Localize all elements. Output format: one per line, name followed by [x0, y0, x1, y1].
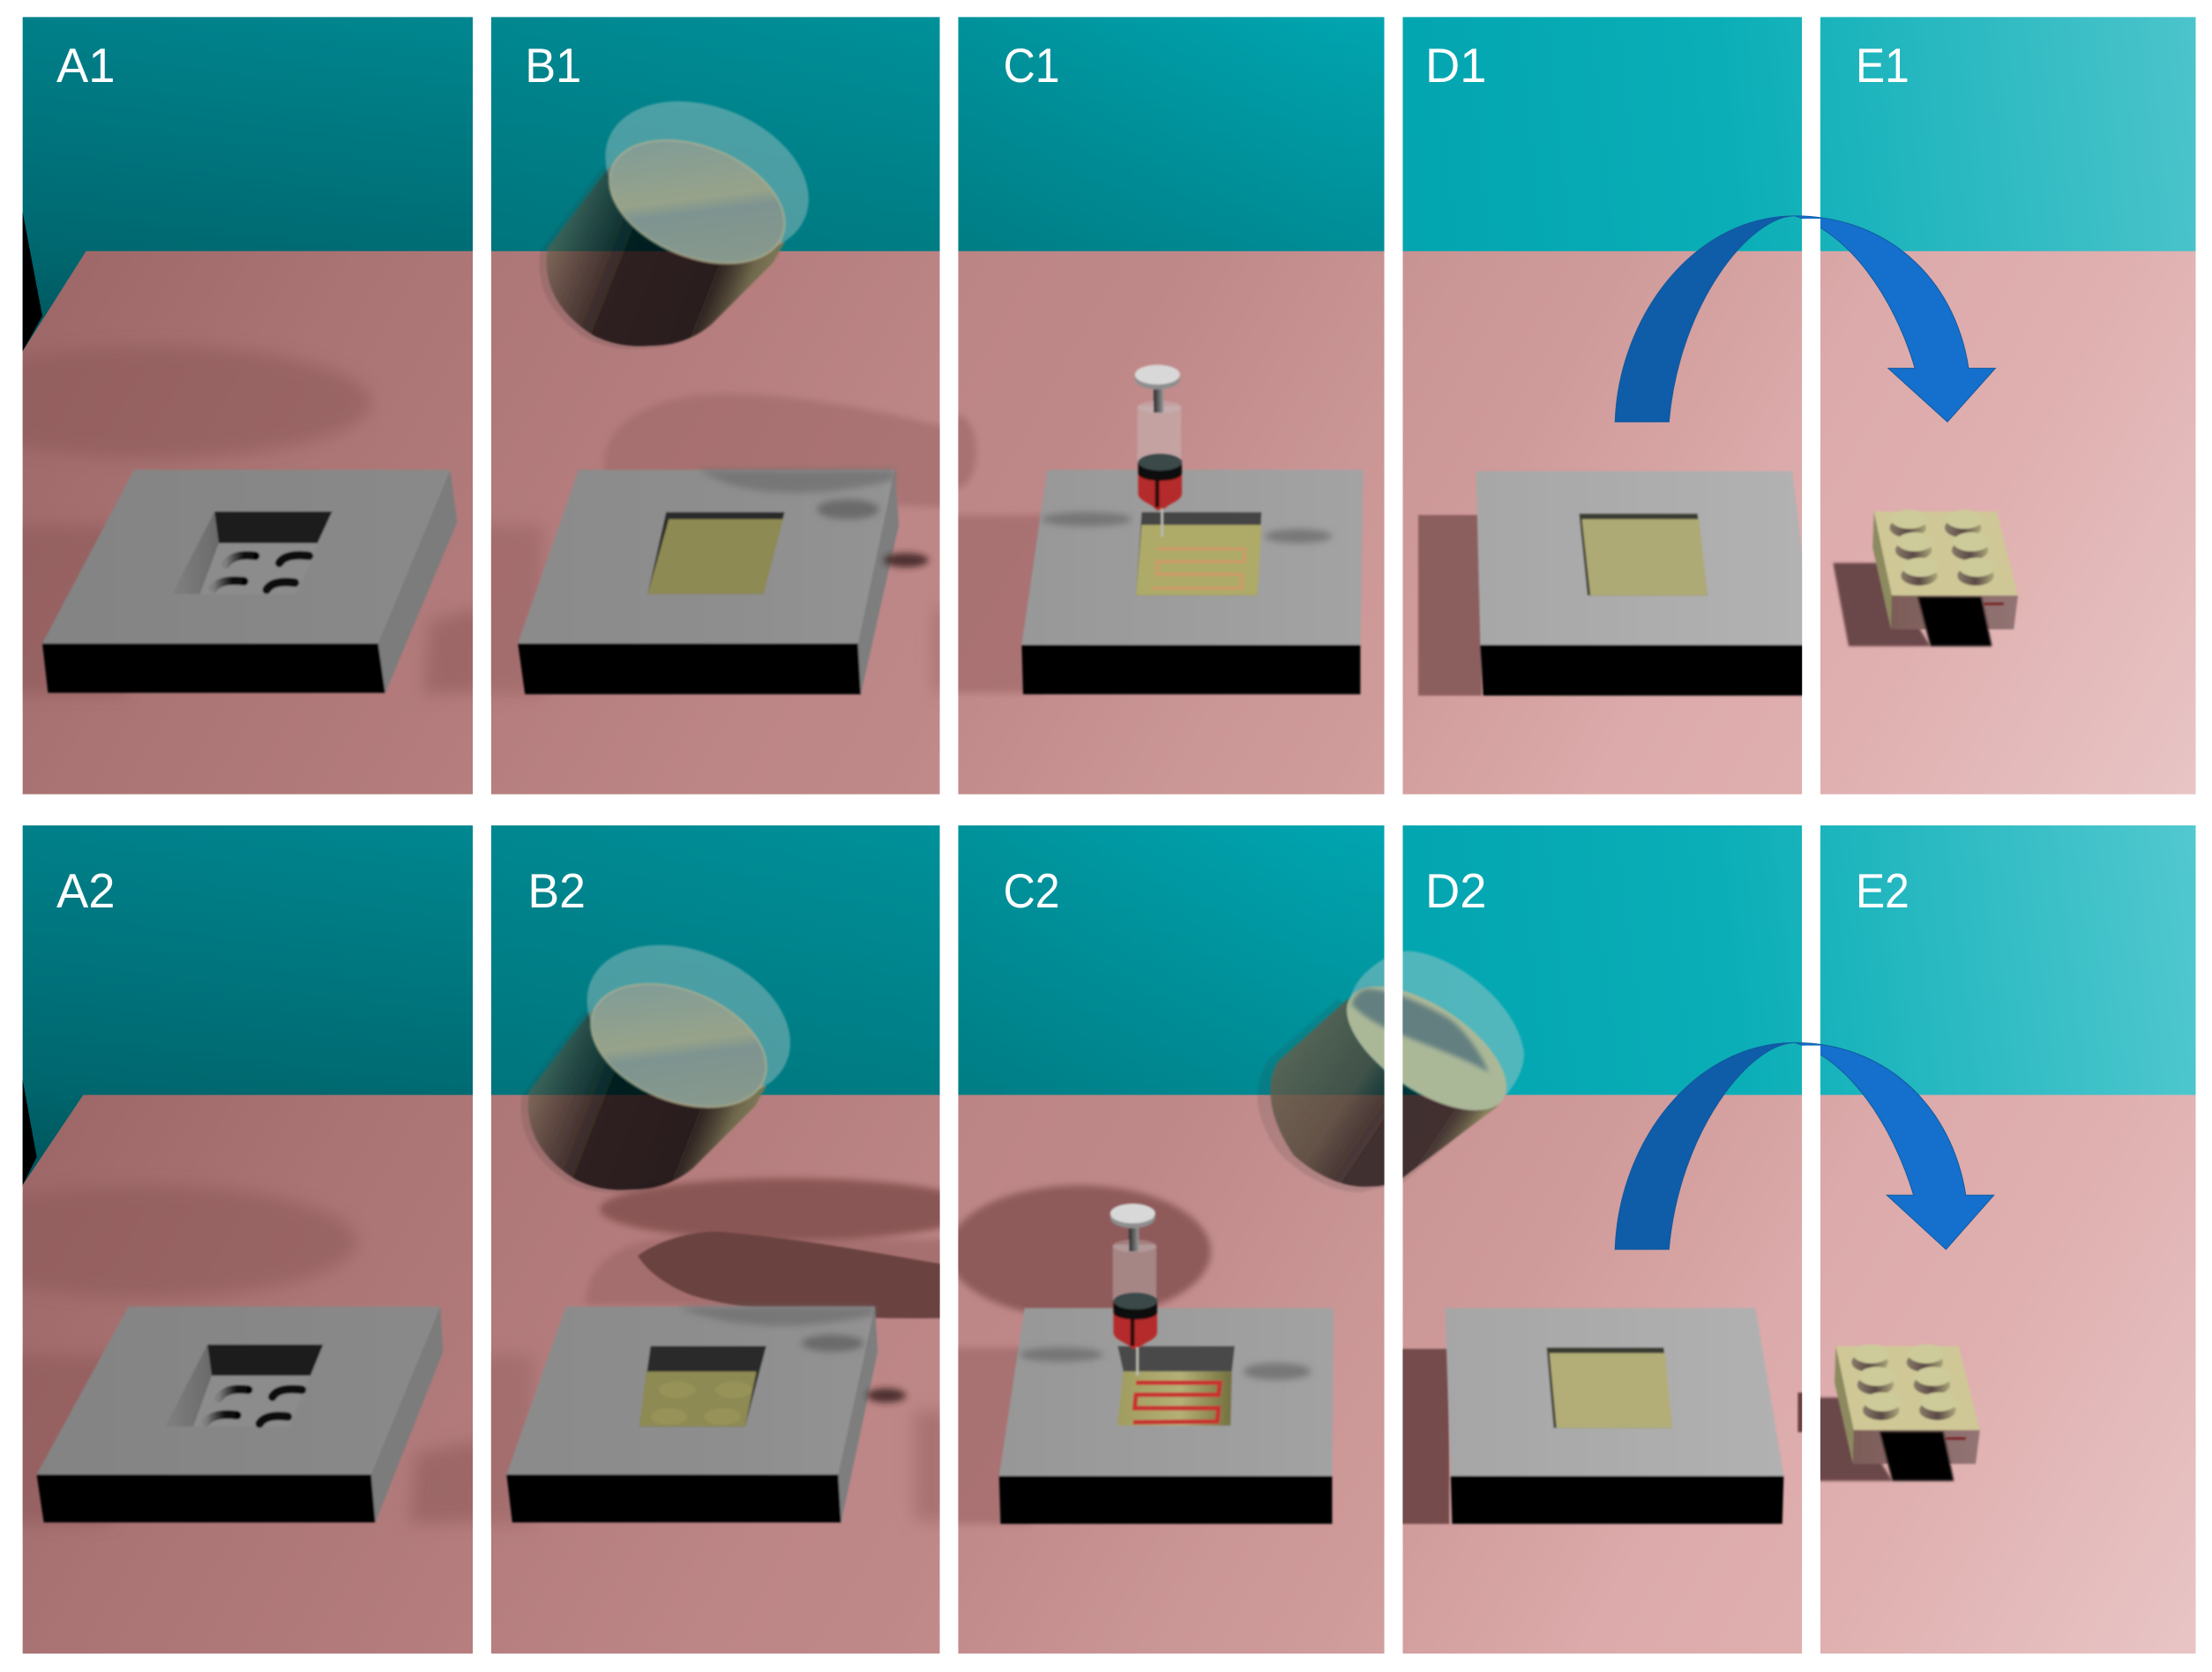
syringe C1	[1135, 365, 1182, 537]
table surface	[1820, 1095, 2196, 1653]
table shadows	[0, 346, 487, 694]
table surface	[1820, 251, 2196, 795]
cylinder mould crossing C2 and D2	[1258, 951, 1527, 1192]
table shadows	[958, 414, 1040, 695]
block A1	[42, 470, 457, 693]
panel: A2	[0, 825, 487, 1653]
table shadows	[604, 393, 960, 508]
label A2: A2	[56, 864, 116, 918]
arrow: flip from D2 to E2	[1615, 1042, 1994, 1250]
cylinder mould B1	[539, 101, 810, 349]
shadow on block	[677, 1307, 906, 1402]
panel: A1	[0, 17, 487, 795]
table surface	[491, 251, 940, 795]
label B1: B1	[525, 39, 581, 93]
shadow on block	[699, 470, 929, 567]
table shadows	[0, 1185, 487, 1524]
shadow on block	[1019, 1347, 1311, 1380]
table shadow	[1418, 515, 1482, 696]
table surface	[1402, 251, 1802, 795]
table surface	[491, 1095, 940, 1653]
label E1: E1	[1856, 39, 1909, 93]
table surface	[1402, 1095, 1802, 1653]
panel: B1	[466, 17, 960, 795]
table shadows	[1390, 1349, 1805, 1524]
table surface	[958, 1095, 1385, 1653]
block C2	[999, 1308, 1334, 1524]
printed brick E2 with shadow	[1795, 1344, 1980, 1481]
table surface	[23, 251, 473, 795]
panel: C1	[937, 17, 1385, 795]
table shadows	[586, 1178, 981, 1305]
cylinder mould B2	[521, 916, 813, 1193]
panel: C2	[945, 825, 1385, 1653]
syringe C2	[1110, 1204, 1157, 1376]
panel: E1	[1820, 17, 2196, 795]
label D1: D1	[1425, 39, 1487, 93]
table shadows	[945, 1185, 1211, 1524]
block D2	[1445, 1308, 1783, 1524]
label E2: E2	[1856, 864, 1909, 918]
printed brick E1 with shadow	[1833, 510, 2018, 646]
block B2	[506, 1307, 878, 1522]
label A1: A1	[56, 39, 116, 93]
table surface	[958, 251, 1385, 795]
block C1	[1021, 470, 1364, 694]
shadow on block	[1042, 512, 1332, 543]
label B2: B2	[527, 864, 586, 918]
block A2	[37, 1307, 443, 1522]
label C1: C1	[1004, 39, 1060, 93]
panel: B2	[466, 825, 981, 1653]
label C2: C2	[1004, 864, 1060, 918]
panel: E2	[1795, 825, 2196, 1653]
room corner in black	[23, 1079, 37, 1185]
table surface	[23, 1095, 473, 1653]
dark cast shadow	[638, 1232, 960, 1318]
room corner in black	[23, 212, 42, 351]
arrow: flip from D1 to E1	[1615, 216, 1995, 422]
label D2: D2	[1425, 864, 1487, 918]
panel: D1	[1402, 17, 1813, 795]
block B1	[518, 470, 899, 694]
panel: D2	[1390, 825, 1805, 1653]
block D1	[1476, 471, 1813, 696]
